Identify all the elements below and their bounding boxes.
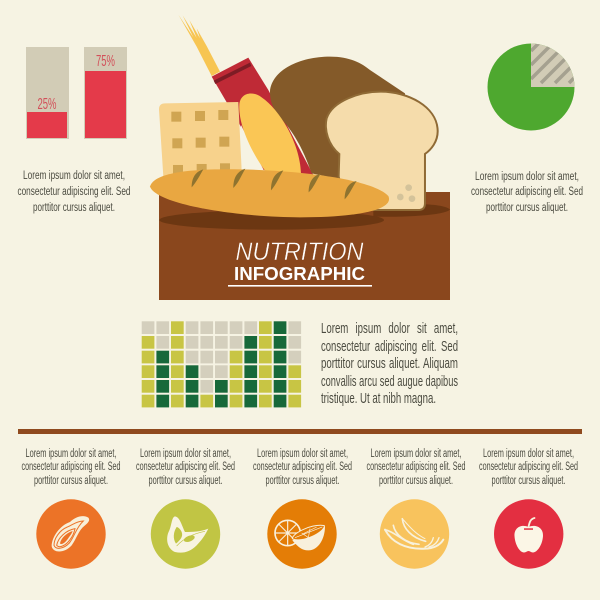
text block: right [471, 171, 583, 214]
icon: orange slices [267, 499, 337, 569]
text block: center paragraph: convallis arcu sed augue dapibus [321, 373, 458, 390]
text block: left: Lorem ipsum dolor sit amet, [23, 170, 125, 182]
bar chart: 25 percent and 75 percent [26, 47, 127, 139]
text columns: bottom row: porttitor cursus aliquet. [34, 475, 108, 487]
text block: center paragraph: Lorem ipsum dolor sit amet, [321, 320, 458, 337]
icon: papaya [36, 499, 106, 569]
text columns: bottom row: consectetur adipiscing elit. Sed [366, 461, 466, 473]
text columns: bottom row: Lorem ipsum dolor sit amet, [26, 448, 116, 460]
text columns: bottom row: porttitor cursus aliquet. [148, 475, 222, 487]
icon: bananas [380, 499, 449, 569]
text block: center paragraph: consectetur adipiscing elit. Sed [321, 338, 458, 355]
text columns: bottom row: consectetur adipiscing elit. Sed [136, 461, 235, 473]
text block: left: consectetur adipiscing elit. Sed [18, 186, 130, 198]
text block: right: porttitor cursus aliquet. [486, 202, 568, 214]
icon: apple [494, 499, 563, 569]
text columns: bottom row [22, 448, 578, 487]
text block: left [18, 170, 130, 214]
title text [228, 238, 372, 287]
text block: center paragraph [321, 320, 458, 407]
text columns: bottom row: porttitor cursus aliquet. [379, 475, 453, 487]
pie chart [488, 44, 574, 130]
brown title panel [159, 192, 450, 300]
text columns: bottom row: porttitor cursus aliquet. [266, 475, 340, 487]
bar chart: 25 percent and 75 percent: 75% [96, 53, 115, 70]
text columns: bottom row: consectetur adipiscing elit. Sed [22, 461, 120, 473]
text columns: bottom row: Lorem ipsum dolor sit amet, [370, 448, 462, 460]
title text: NUTRITION [236, 238, 364, 266]
waffle chart [142, 321, 301, 407]
divider bar [18, 429, 582, 434]
text columns: bottom row: Lorem ipsum dolor sit amet, [140, 448, 231, 460]
title text: INFOGRAPHIC [234, 263, 365, 284]
text block: center paragraph: porttitor cursus aliquet. Aliquam [321, 355, 458, 372]
bar chart: 25 percent and 75 percent: 25% [38, 96, 57, 113]
icon: avocado [151, 499, 220, 569]
text block: left: porttitor cursus aliquet. [33, 202, 115, 214]
text columns: bottom row: consectetur adipiscing elit. Sed [253, 461, 352, 473]
hero: bread illustration and title panel [150, 15, 450, 300]
illustration: bakery goods [150, 15, 450, 230]
text columns: bottom row: Lorem ipsum dolor sit amet, [257, 448, 348, 460]
text block: center paragraph: tristique. Ut at nibh magna. [321, 390, 436, 407]
